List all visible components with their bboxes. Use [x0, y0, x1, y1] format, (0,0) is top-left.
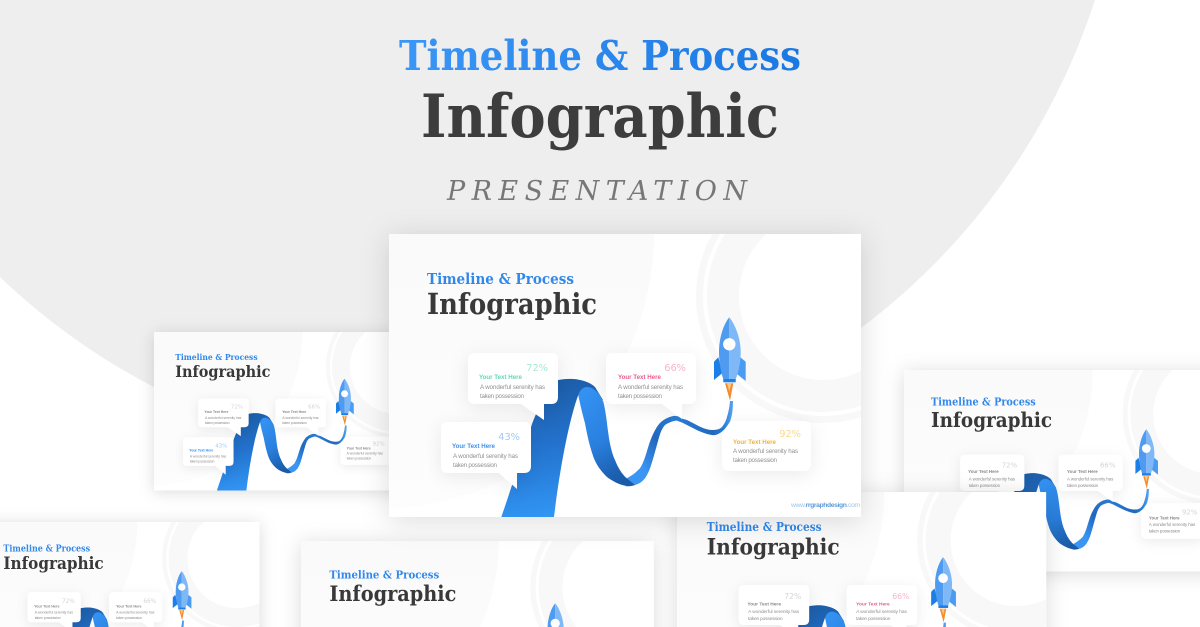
slide preview: bottom right: Your Text Here	[747, 601, 781, 607]
slide preview: right: taken possession	[969, 483, 1001, 488]
callout: 72%: Your Text Here	[479, 374, 523, 381]
slide preview: bottom left: 72%	[62, 599, 75, 605]
callout: 66%: A wonderful serenity has	[618, 384, 683, 391]
slide preview: right: A wonderful serenity has	[969, 476, 1016, 481]
slide preview: left: Your Text Here	[189, 448, 213, 452]
slide preview: bottom right: Your Text Here	[856, 601, 890, 607]
slide preview: right: 72%	[1002, 462, 1018, 470]
callout: 66%: Your Text Here	[618, 374, 662, 381]
slide preview: left: Your Text Here	[282, 410, 306, 414]
icon: rocket	[714, 317, 746, 401]
callout: 92%	[722, 421, 811, 471]
slide preview: left: taken possession	[190, 459, 215, 463]
slide preview: bottom left	[0, 518, 266, 627]
slide preview: bottom middle	[294, 536, 661, 627]
slide preview: left: A wonderful serenity has	[347, 452, 383, 456]
slide preview: bottom right: Timeline & Process	[707, 520, 822, 534]
slide preview: left: 92%	[373, 442, 385, 448]
callout: 72%: A wonderful serenity has	[480, 384, 545, 391]
slide preview: right: Your Text Here	[1067, 469, 1098, 474]
slide preview: bottom right: Infographic	[707, 535, 840, 561]
callout: 66%	[604, 364, 698, 419]
slide preview: left: taken possession	[205, 421, 230, 425]
slide preview: right	[897, 365, 1200, 580]
slide preview: bottom middle: Timeline & Process	[329, 567, 439, 581]
slide preview: right: Timeline & Process	[931, 396, 1036, 409]
slide preview: bottom right: taken possession	[748, 616, 783, 622]
slide preview: left: A wonderful serenity has	[282, 416, 319, 420]
slide preview: bottom left: 66%	[143, 599, 157, 605]
slide preview: bottom right: 72%	[784, 592, 801, 601]
title: Timeline & Process: Timeline & Process	[399, 32, 801, 80]
slide preview: main centre	[379, 228, 871, 530]
callout: 43%: Your Text Here	[452, 443, 496, 450]
callout: 66%: taken possession	[618, 393, 663, 400]
slide preview: right: A wonderful serenity has	[1149, 522, 1196, 527]
slide preview: bottom left: taken possession	[35, 616, 61, 620]
slide preview: left: Timeline & Process	[175, 352, 258, 362]
slide preview: right: A wonderful serenity has	[1067, 476, 1114, 481]
slide preview: left: taken possession	[282, 421, 307, 425]
callout: 72%: taken possession	[480, 393, 525, 400]
slide preview: right: Infographic	[931, 408, 1052, 432]
slide preview: bottom right	[670, 486, 1054, 627]
slide preview: left: 72%	[231, 405, 243, 411]
slide preview: bottom middle: Infographic	[329, 582, 456, 607]
slide preview: bottom left: Timeline & Process	[3, 545, 90, 554]
slide heading: Timeline & Process: Timeline & Process	[427, 270, 574, 288]
slide preview: left: A wonderful serenity has	[190, 454, 227, 458]
slide preview: left: 43%	[215, 443, 227, 449]
callout: 43%: A wonderful serenity has	[453, 453, 518, 460]
slide preview: bottom left: A wonderful serenity has	[35, 610, 73, 614]
slide preview: left	[148, 329, 389, 498]
slide preview: left: A wonderful serenity has	[205, 416, 242, 420]
subtitle: PRESENTATION: PRESENTATION	[446, 176, 748, 207]
slide preview: left: Your Text Here	[204, 410, 229, 414]
callout: 72%: 72%	[526, 363, 548, 374]
slide preview: right: taken possession	[1067, 483, 1099, 488]
slide preview: right: taken possession	[1149, 528, 1181, 533]
callout: 43%: taken possession	[453, 462, 498, 469]
slide preview: right: Your Text Here	[1149, 516, 1180, 521]
callout: 43%: 43%	[498, 432, 520, 443]
slide preview: bottom left: Infographic	[3, 553, 104, 573]
slide preview: right: 66%	[1100, 462, 1116, 470]
blue ribbon path	[501, 379, 733, 517]
slide preview: bottom left: taken possession	[116, 616, 142, 620]
callout: 43%	[441, 422, 531, 489]
slide preview: left: taken possession	[347, 457, 371, 461]
callout: 92%: taken possession	[733, 457, 778, 464]
callout: 92%: Your Text Here	[733, 439, 777, 446]
slide preview: right: Your Text Here	[968, 469, 999, 474]
slide preview: bottom left: Your Text Here	[116, 605, 141, 609]
slide preview: left: Your Text Here	[347, 447, 371, 451]
callout: 92%: 92%	[779, 429, 801, 440]
website credit: www.rrgraphdesign.com	[790, 502, 860, 509]
slide preview: bottom left: Your Text Here	[34, 605, 59, 609]
slide preview: right: 92%	[1182, 509, 1198, 517]
callout: 92%: A wonderful serenity has	[733, 448, 798, 455]
slide preview: bottom left: A wonderful serenity has	[116, 610, 155, 614]
slide preview: bottom right: A wonderful serenity has	[748, 609, 800, 615]
title: Infographic: Infographic	[421, 82, 779, 152]
slide heading: Infographic: Infographic	[427, 287, 597, 321]
slide preview: bottom right: A wonderful serenity has	[856, 609, 907, 615]
callout: 66%: 66%	[664, 363, 686, 374]
slide preview: bottom right: taken possession	[856, 616, 891, 622]
background gray circle	[0, 0, 1127, 462]
callout: 72%	[466, 364, 560, 420]
slide preview: bottom right: 66%	[892, 592, 909, 601]
slide preview: left: Infographic	[175, 362, 270, 381]
slide preview: left: 66%	[308, 405, 320, 411]
